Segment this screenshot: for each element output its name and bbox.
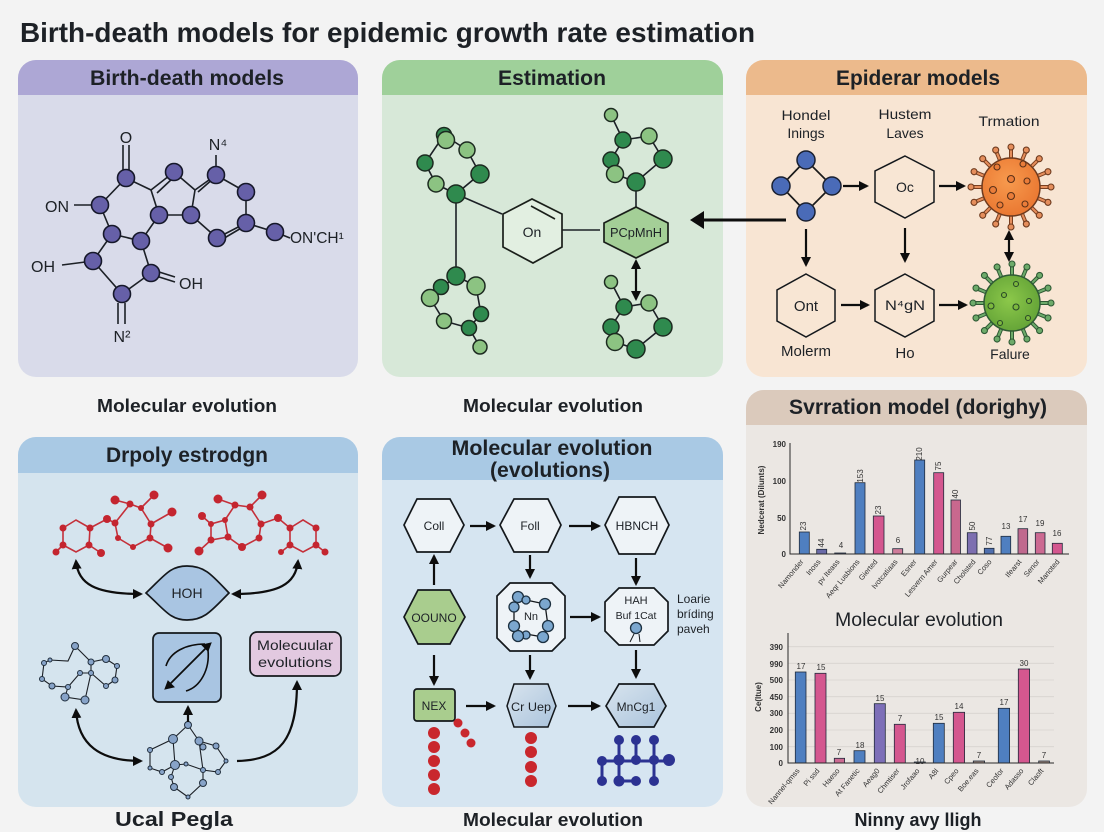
hexagon: Coll: Coll [424,519,444,533]
blue molecule bottom [148,722,228,799]
molecule diagram: OH [179,276,203,293]
bar chart: top: 16 [1053,529,1062,538]
bar chart: top: Manoted [1036,558,1062,586]
bar chart: bottom: 990 [770,660,784,669]
bar chart: top: 210 [915,447,924,461]
bar chart: bottom: 390 [770,643,784,652]
bar chart: bottom: Boe.eas [956,766,981,793]
molecule diagram: O [120,130,132,147]
bar chart: top: 19 [1036,519,1045,528]
bar chart: bottom: Pi ssd [802,767,822,788]
bar chart: top: Ifearst [1003,557,1024,579]
bar chart: top: 17 [1019,515,1028,524]
column labels: Hondel [782,107,830,123]
hexagon: On: On [523,224,541,240]
octagon: Nn: Nn [524,611,538,623]
bar chart: top: 50 [968,521,977,530]
bar chart: bottom: Nannel-qmss [766,766,802,806]
red molecule right [194,490,328,556]
box: NEX [414,689,455,721]
bar chart: bottom: 30 [1020,659,1029,668]
panel: epidemiological models [746,60,1087,377]
molecule diagram: OH [31,259,55,276]
bar chart: bottom: Ceofor [984,766,1006,790]
panel: drpoly estrodgn [18,437,358,807]
hexagon: PCpMnH [604,207,668,258]
side note [677,592,714,636]
column labels: Inings [787,125,825,141]
column labels: Falure [990,346,1030,362]
hexagon: Foll [500,499,561,552]
square icon: double arrow [153,633,221,702]
hexagon: Cr Uep: Cr Uep [511,700,551,714]
molecule diagram: N⁴ [209,137,227,154]
bar chart: bottom: 0 [779,759,784,768]
bar chart: bottom: A8I [926,767,941,781]
bar chart: top: 4 [839,541,844,550]
hexagon: OOUNO [404,590,465,644]
hexagon: Ont: Ont [794,298,819,315]
side note: paveh [677,622,710,636]
heading: birth-death models: Birth-death models [90,67,284,90]
node diamond [772,151,841,221]
virus: green [970,261,1054,345]
hexagon: Ont [777,274,835,337]
bar chart: bottom: 100 [770,743,784,752]
bar chart: top [757,440,1069,600]
bar chart: top: Lesvern Amer [903,557,940,599]
bar chart: top: Gierted [857,558,880,582]
octagon: HAH: Buf 1Cat [616,610,657,622]
column labels: Molerm [781,343,831,360]
molecule diagram: ON [45,199,69,216]
bar chart: top: 77 [985,536,994,545]
column labels: Trmation [978,113,1040,129]
heading: molecular evolution (evolutions): (evolutions) [490,459,610,482]
bar chart: bottom: 300 [770,709,784,718]
hexagon: NgN [875,274,934,337]
molecule diagram: N² [114,329,131,346]
bar chart: bottom: 14 [955,702,964,711]
column labels: Hustem [878,106,932,122]
hexagon: Coll [404,499,464,552]
bar chart: bottom: 7 [1042,751,1047,760]
bar chart: bottom: 500 [770,676,784,685]
hexagon: HBNCH [605,497,669,554]
title: Birth-death models for epidemic growth rate estimation [20,17,755,48]
hexagon: OOUNO: OOUNO [411,611,457,625]
hexagon: MnCg1 [606,684,666,727]
panel: birth-death models [18,60,358,377]
bar chart: bottom: 7 [837,748,842,757]
bar chart: top: 100 [773,477,787,486]
curved arrows [76,561,298,761]
bar chart: bottom: At Fanetic [833,766,862,798]
heading: svrration model: Svrration model (dorighy) [789,396,1047,419]
hexagon: Oc [875,156,934,218]
bar chart: top: Aeqr Lusbions [824,557,862,600]
leaf node: HOH [146,566,229,620]
virus: orange [968,144,1054,230]
flow arrows [434,526,636,706]
navy chain [597,735,675,786]
red chains [428,718,537,795]
heading: estimation: Estimation [498,67,606,90]
heading: epiderar models: Epiderar models [836,67,1000,90]
side note: bríding [677,607,714,621]
box: NEX: NEX [422,699,446,713]
hexagon: Oc: Oc [896,179,914,195]
octagon: HAH [605,588,668,645]
arrow: double vertical [635,261,637,299]
bar chart: bottom: Jrofaao [899,767,922,791]
callout: molecular evolutions: evolutions [258,654,332,670]
red molecule left [52,490,176,557]
octagon: Nn [497,583,565,651]
bar chart: bottom: 7 [898,714,903,723]
heading: molecular evolution (evolutions) [452,437,652,482]
bar chart: top: Namonder [776,557,806,590]
column labels: Laves [886,125,924,141]
molecule network [417,108,672,358]
bar chart: bottom: Aeag0 [861,767,882,789]
hexagon: Cr Uep [507,684,556,727]
hexagon: PCpMnH: PCpMnH [610,225,662,240]
heading: molecular evolution (evolutions): Molecular evolution [452,437,652,460]
bar chart: top: 44 [817,538,826,547]
hexagon: MnCg1: MnCg1 [617,700,656,714]
molecule diagram: ON'CH¹ [290,230,344,247]
bar chart: top: 23 [799,521,808,530]
bar chart: bottom: Cpeo [942,767,961,786]
bar chart: bottom: 17 [797,662,806,671]
bar chart: top: Inoss [804,557,823,577]
column labels [781,106,1040,362]
panel: estimation [382,60,723,377]
bar chart: bottom: Adasso [1003,767,1026,791]
bar chart: top: 190 [773,440,787,449]
bar chart: top: Cholsted [952,558,978,586]
hexagon: HBNCH: HBNCH [616,519,658,533]
bar chart: bottom: 450 [770,693,784,702]
bar chart: bottom: 17 [1000,698,1009,707]
hexagon: On [503,199,562,263]
bar chart: top: 75 [934,461,943,470]
octagon: HAH: HAH [624,595,648,607]
bar chart: top: 13 [1002,522,1011,531]
bar chart: top: Coso [975,558,994,577]
bar chart: top: Gurpear [935,557,960,584]
bar chart: bottom: Ce(Itue) [754,682,763,712]
bar chart: bottom: Claoft [1026,766,1046,787]
bar chart: top: 50 [777,514,787,523]
hexagon: NgN: N⁴gN [885,297,925,313]
caption: panel 4: Ucal Pegla [115,809,234,831]
bar chart: top: 153 [856,469,865,483]
callout: molecular evolutions: Molecuular [257,637,333,653]
bar chart: bottom: 18 [856,741,865,750]
bar chart: bottom [754,633,1054,806]
panel: molecular evolution flow [382,437,723,807]
bar chart: top: 23 [874,505,883,514]
bar chart: top: Nedcerat (Dilunts) [757,465,766,534]
bar chart: bottom: 10 [916,757,925,766]
bar chart: bottom: Haeso [821,767,842,789]
caption: panel 5: Molecular evolution [463,810,643,830]
arrow: epidemic models to estimation [690,211,786,229]
caption: panel 2: Molecular evolution [463,396,643,416]
bar chart: top: 6 [896,536,901,545]
heading: drpoly estrodgn: Drpoly estrodgn [106,444,268,467]
bar chart: bottom: 200 [770,726,784,735]
caption: panel 6: Ninny avy lligh [854,810,982,830]
bar chart: bottom: 15 [935,713,944,722]
bar chart: top: Ivotcatiaas [870,557,900,591]
blue molecule left [40,642,120,704]
bar chart: top: pv Iteass [815,557,842,586]
bar chart: bottom: Chmtiser [875,766,902,795]
flow arrows [806,186,1009,305]
bar chart: top: Esner [899,557,919,578]
bar chart: bottom: 15 [876,694,885,703]
caption: panel 1: Molecular evolution [97,396,277,416]
chart heading: molecular evolution: Molecular evolution [835,610,1003,631]
callout: molecular evolutions [250,632,341,676]
leaf node: HOH: HOH [171,585,203,601]
hexagon: Foll: Foll [520,519,540,533]
molecule diagram [31,130,344,346]
bar chart: top: 40 [951,489,960,498]
bar chart: bottom: 15 [817,663,826,672]
side note: Loarie [677,592,711,606]
bar chart: top: Senor [1022,557,1042,579]
panel: saturation model charts [746,390,1087,807]
bar chart: bottom: 7 [977,751,982,760]
column labels: Ho [895,345,915,362]
bar chart: top: 0 [782,550,787,559]
